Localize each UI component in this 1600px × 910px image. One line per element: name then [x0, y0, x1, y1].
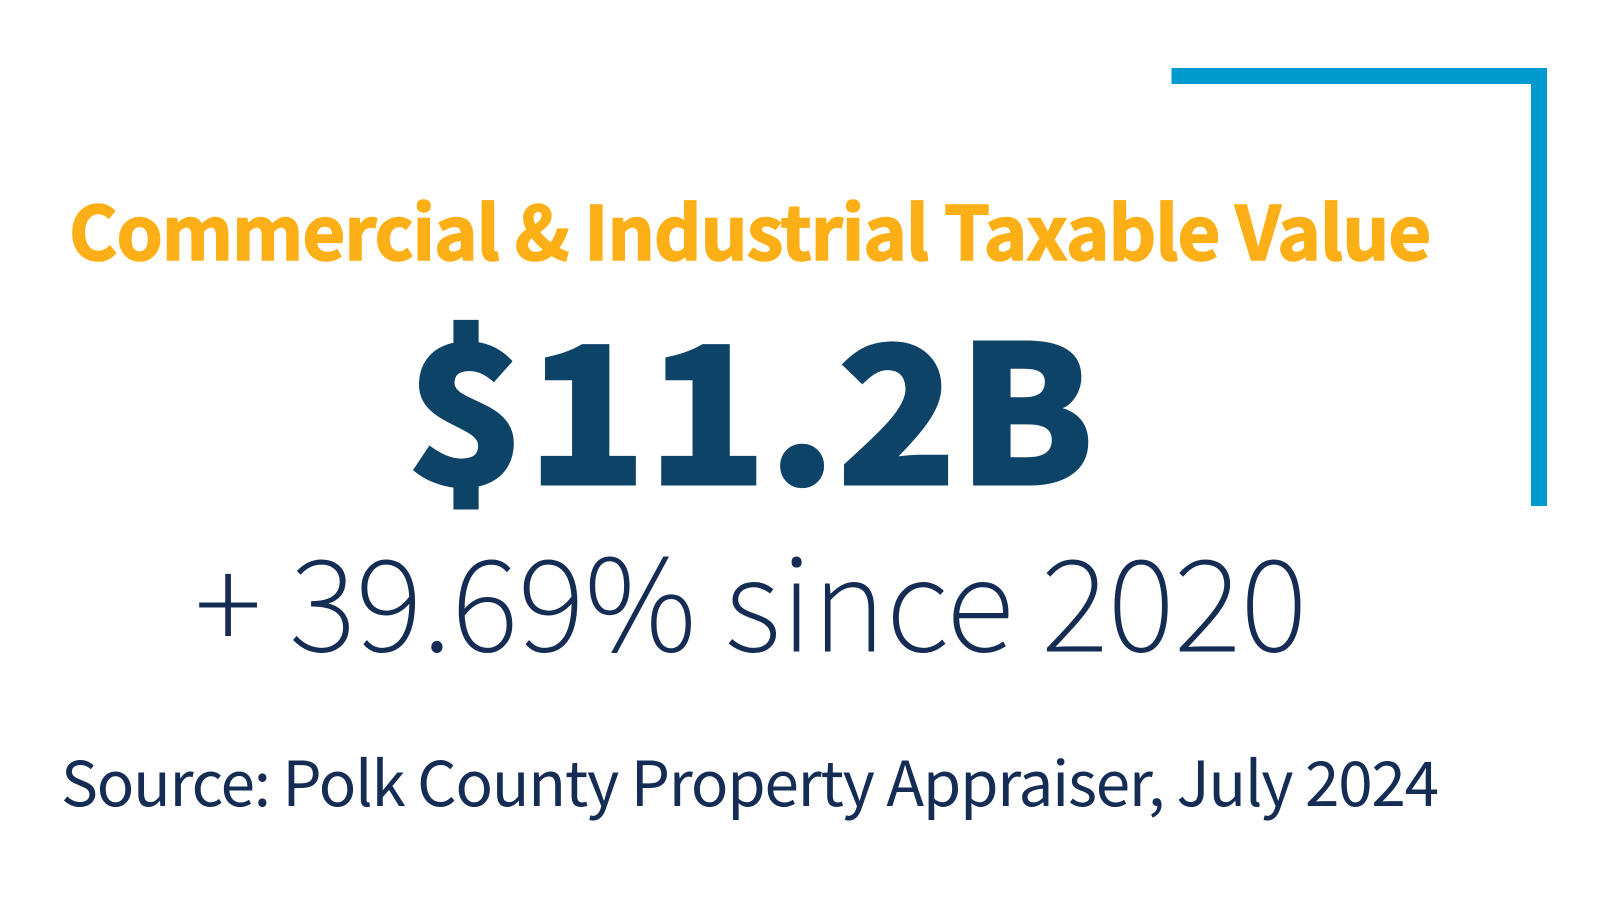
main value: $11.2B: [406, 263, 1095, 541]
source note: Source: Polk County Property Appraiser, July 2024: [61, 734, 1438, 824]
title: Commercial & Industrial Taxable Value: [69, 175, 1430, 282]
corner bracket: [1172, 68, 1547, 506]
growth statistic: + 39.69% since 2020: [195, 504, 1307, 688]
